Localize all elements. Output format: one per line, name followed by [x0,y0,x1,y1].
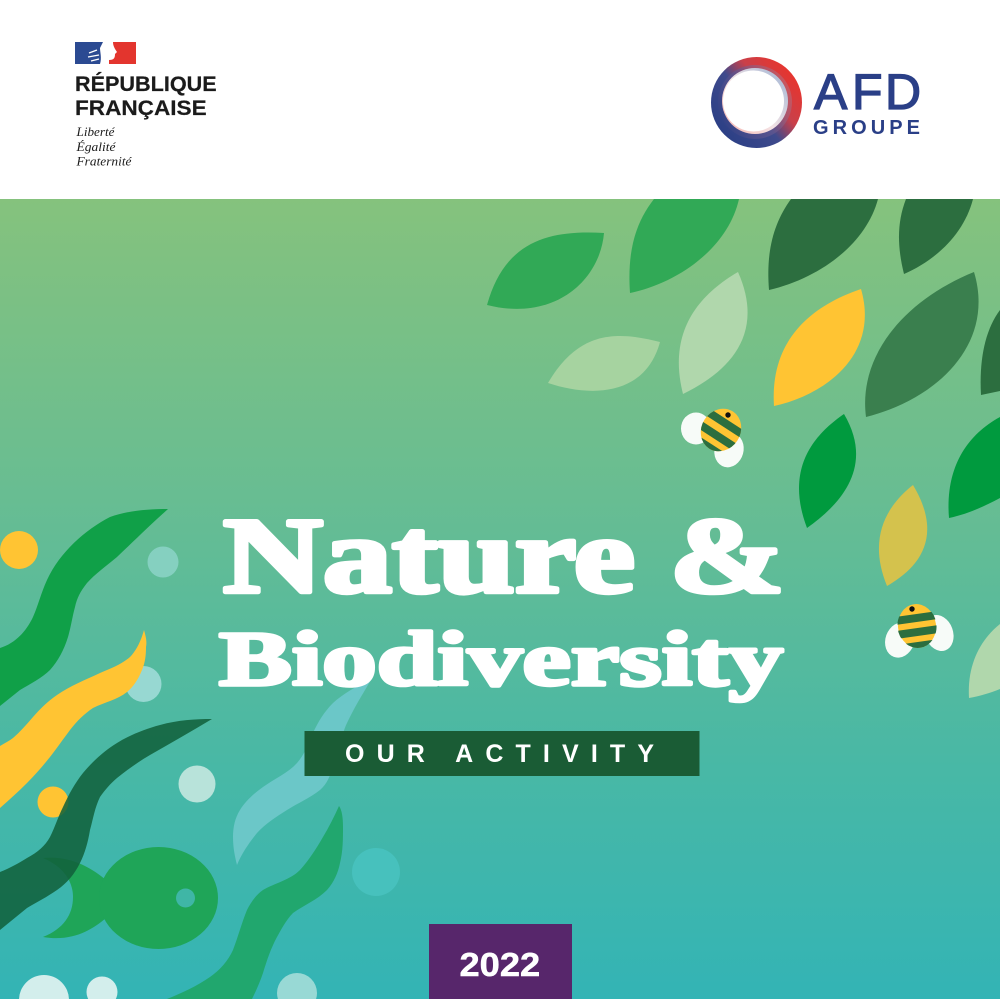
wordmark: AFD [814,64,921,120]
leaf: olive yellow [879,485,927,586]
wings [681,412,711,444]
fish [43,847,218,949]
title [219,495,785,702]
logo: AFD Groupe [711,57,921,148]
bee: upper [681,408,744,468]
title line 2: Biodiversity [219,617,783,702]
leaf: dark green edge [981,310,1000,395]
seaweed: pale blue [233,680,371,865]
title line 1: Nature & [223,495,785,616]
wings [880,618,920,662]
body [99,847,218,949]
bubbles [0,531,400,999]
leaf: pale green low [548,336,660,391]
leaf: dark green top [768,199,878,290]
subtitle banner [304,731,700,776]
seaweed: teal green bottom [167,806,343,999]
body [700,408,742,452]
subtitle banner: OUR ACTIVITY [345,740,654,768]
eye [176,888,195,908]
seaweed: bright green [0,509,168,706]
leaf: large dark green [865,272,979,417]
name: RÉPUBLIQUE [75,71,217,96]
leaf: mid green top [629,199,739,293]
year badge [429,924,572,999]
eye [725,412,731,418]
eye [909,606,915,612]
seaweed: yellow [0,630,146,808]
motto [75,124,133,168]
leaf: pale green edge [969,624,1000,698]
leaf: pale green [679,272,748,394]
flag with Marianne [75,42,136,64]
leaf: bright green edge [948,417,1000,518]
leaf: dark green top right [899,199,973,274]
seaweed: dark green [0,719,212,930]
bee: lower [885,604,954,658]
leaves cluster [487,199,1000,698]
motto: Liberté [75,124,116,139]
year badge: 2022 [460,947,540,984]
leaf: mid green [487,233,604,309]
white header band [0,0,1000,199]
motto: Égalité [75,139,117,154]
logo: République Française [75,42,217,168]
logo: République Française: FRANÇAISE [75,96,207,120]
tail [43,858,106,938]
leaf: bright green [799,414,856,528]
motto: Fraternité [75,154,133,168]
body [898,604,937,648]
logo: AFD Groupe: GROUPE [813,117,920,139]
ring emblem [711,57,802,148]
leaf: yellow [774,289,865,406]
